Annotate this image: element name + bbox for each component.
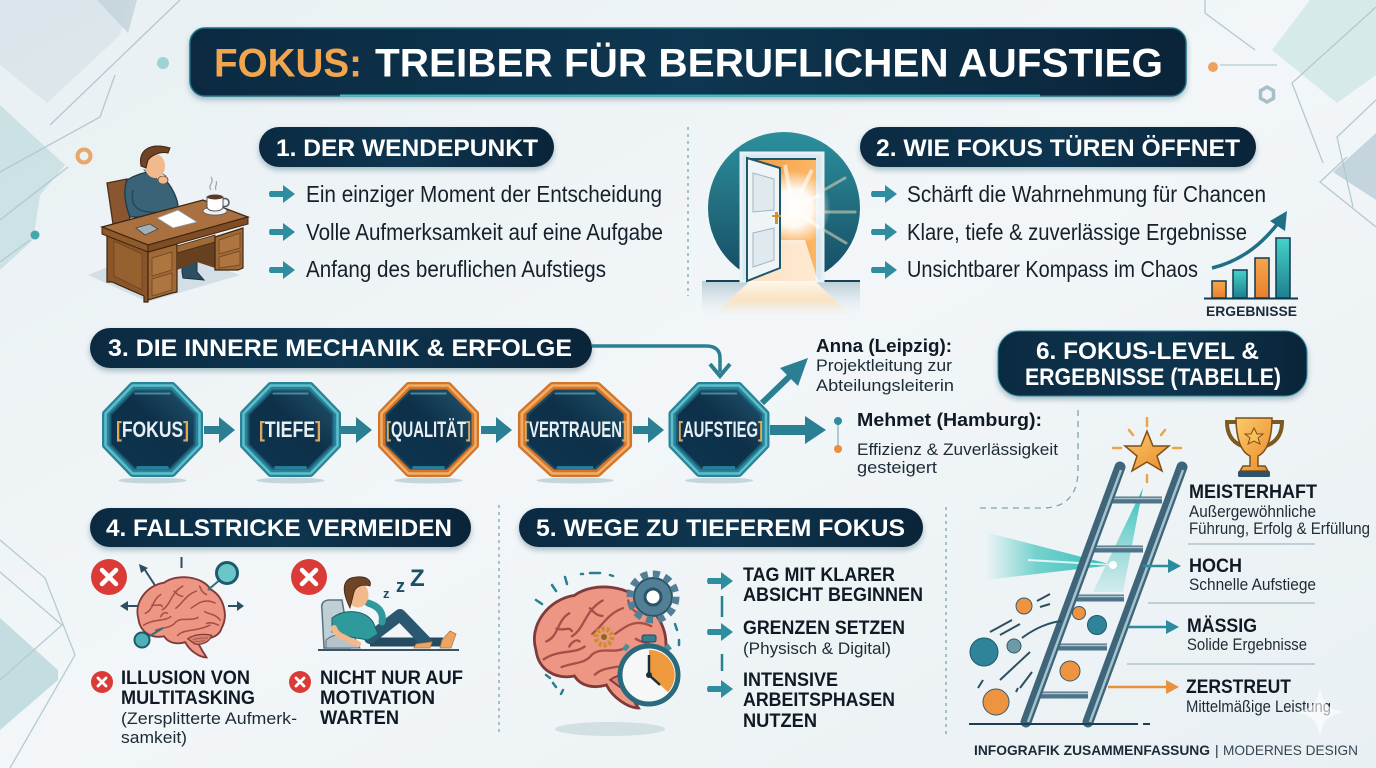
level: Mässig <box>1128 614 1307 654</box>
arrow bullets and text: Anfang des beruflichen Aufstiegs <box>306 256 606 282</box>
panel: 4. Fallstricke vermeiden <box>90 508 471 747</box>
heading 4 <box>90 508 471 547</box>
connector arrow to Aufstieg <box>592 346 730 376</box>
level: Zerstreut: ZERSTREUT <box>1186 676 1291 698</box>
title text: FOKUS: <box>214 42 362 86</box>
pitfall: motivation: WARTEN <box>320 707 399 729</box>
level: Meisterhaft: MEISTERHAFT <box>1189 481 1317 503</box>
heading 6: 6. FOKUS-LEVEL & <box>1036 338 1259 365</box>
illustration: open door <box>702 132 860 315</box>
pitfall: multitasking: MULTITASKING <box>121 687 255 709</box>
text: tips: (Physisch & Digital) <box>743 639 891 658</box>
step: Tiefe: [TIEFE] <box>259 417 321 442</box>
text: Anna <box>816 336 954 395</box>
heading 2: 2. WIE FOKUS TÜREN ÖFFNET <box>876 135 1240 162</box>
arrow bullets and text: Ein einziger Moment der Entscheidung <box>306 181 662 207</box>
level: Hoch <box>1143 555 1316 594</box>
pitfall: multitasking: (Zersplitterte Aufmerk- <box>121 709 297 728</box>
heading 6: ERGEBNISSE (TABELLE) <box>1025 364 1281 391</box>
title text: TREIBER FÜR BERUFLICHEN AUFSTIEG <box>375 40 1163 86</box>
text: Mehmet: gesteigert <box>857 458 937 477</box>
pitfall: motivation <box>289 667 463 729</box>
pitfall: motivation: NICHT NUR AUF <box>320 667 463 689</box>
heading 2 <box>860 127 1256 167</box>
level: Zerstreut <box>1108 676 1331 716</box>
text: tips: NUTZEN <box>743 710 817 732</box>
text: Zzz: z <box>396 576 405 596</box>
text: tips <box>743 564 923 732</box>
arrow bullets and text <box>871 181 1266 282</box>
text: tips: INTENSIVE <box>743 669 838 691</box>
step: Qualität <box>382 386 476 484</box>
heading 5 <box>519 508 923 547</box>
panel: 1. Der Wendepunkt <box>88 127 663 302</box>
pitfall: multitasking: samkeit) <box>121 728 187 747</box>
heading 6 <box>998 331 1307 396</box>
step: Qualität: [QUALITÄT] <box>386 417 471 442</box>
arrow bullets and text: Unsichtbarer Kompass im Chaos <box>907 256 1198 282</box>
text: Anna: Projektleitung zur <box>816 356 952 375</box>
step: Aufstieg <box>672 386 766 484</box>
text: Zzz: z <box>383 586 390 601</box>
level: Hoch: HOCH <box>1189 555 1242 577</box>
illustration: brain multitasking <box>120 557 244 658</box>
text: tips: ARBEITSPHASEN <box>743 689 895 711</box>
arrow <box>633 417 664 443</box>
text: Mehmet: Effizienz & Zuverlässigkeit <box>857 440 1058 459</box>
icon: red cross <box>291 559 327 595</box>
text: Zzz: Z <box>410 565 425 592</box>
illustration: man sleeping <box>318 577 459 650</box>
heading 4: 4. FALLSTRICKE VERMEIDEN <box>106 515 452 542</box>
sparkle <box>1296 688 1344 736</box>
arrow bullets and text: Volle Aufmerksamkeit auf eine Aufgabe <box>306 219 663 245</box>
step: Vertrauen: [VERTRAUEN] <box>524 417 627 442</box>
bar chart: Ergebnisse: ERGEBNISSE <box>1206 303 1297 319</box>
arrow up to Anna <box>762 358 808 403</box>
arrows and connectors <box>707 572 733 698</box>
arrow bullets and text: Klare, tiefe & zuverlässige Ergebnisse <box>907 219 1247 245</box>
step: Fokus <box>106 386 200 484</box>
footer: INFOGRAFIK ZUSAMMENFASSUNG <box>974 742 1210 758</box>
step: Vertrauen <box>522 386 628 484</box>
step: Aufstieg: [AUFSTIEG] <box>678 417 763 442</box>
level: Meisterhaft: Außergewöhnliche <box>1189 502 1316 521</box>
illustration: ladder with focus beam and balls <box>969 467 1183 724</box>
text: tips: TAG MIT KLARER <box>743 564 895 586</box>
level: Hoch: Schnelle Aufstiege <box>1189 575 1316 594</box>
icon: red cross <box>91 559 127 595</box>
pitfall: multitasking <box>91 667 297 747</box>
panel: 3. Die innere Mechanik & Erfolge <box>90 328 1058 484</box>
level: Zerstreut: Mittelmäßige Leistung <box>1186 697 1331 716</box>
heading 5: 5. WEGE ZU TIEFEREM FOKUS <box>536 515 905 542</box>
panel: 2. Wie Fokus Türen öffnet <box>702 127 1298 319</box>
arrow right to Mehmet <box>770 416 826 444</box>
level: Mässig: Solide Ergebnisse <box>1187 635 1307 654</box>
heading 3 <box>90 328 592 368</box>
pitfall: multitasking: ILLUSION VON <box>121 667 250 689</box>
icon: trophy <box>1227 418 1282 477</box>
panel: 6. Fokus-Level & Ergebnisse <box>969 331 1370 724</box>
text: Anna: Abteilungsleiterin <box>816 376 954 395</box>
icon: star <box>1113 418 1181 482</box>
level: Meisterhaft <box>1189 481 1370 538</box>
heading 1 <box>259 127 554 167</box>
illustration: brain with gear and stopwatch <box>534 573 679 736</box>
title banner <box>190 28 1186 96</box>
text: Anna: Anna (Leipzig): <box>816 336 952 356</box>
illustration: man at desk <box>88 146 248 302</box>
footer: MODERNES DESIGN <box>1223 742 1358 758</box>
arrow <box>481 417 512 443</box>
panel: 5. Wege zu tieferem Fokus <box>519 508 923 736</box>
text: tips: GRENZEN SETZEN <box>743 617 905 639</box>
heading 1: 1. DER WENDEPUNKT <box>276 135 538 162</box>
arrow bullets and text <box>269 181 663 282</box>
arrow <box>341 417 372 443</box>
arrow bullets and text: Schärft die Wahrnehmung für Chancen <box>907 181 1266 207</box>
step: Fokus: [FOKUS] <box>116 417 189 442</box>
text: Mehmet: Mehmet (Hamburg): <box>857 410 1042 430</box>
text: Mehmet <box>834 410 1058 477</box>
heading 3: 3. DIE INNERE MECHANIK & ERFOLGE <box>108 335 572 362</box>
step: Tiefe <box>244 386 338 484</box>
level: Mässig: MÄSSIG <box>1187 614 1257 637</box>
text: tips: ABSICHT BEGINNEN <box>743 584 923 606</box>
footer: | <box>1215 742 1219 758</box>
pitfall: motivation: MOTIVATION <box>320 687 435 709</box>
bar chart: Ergebnisse <box>1204 211 1298 319</box>
arrow <box>204 417 235 443</box>
